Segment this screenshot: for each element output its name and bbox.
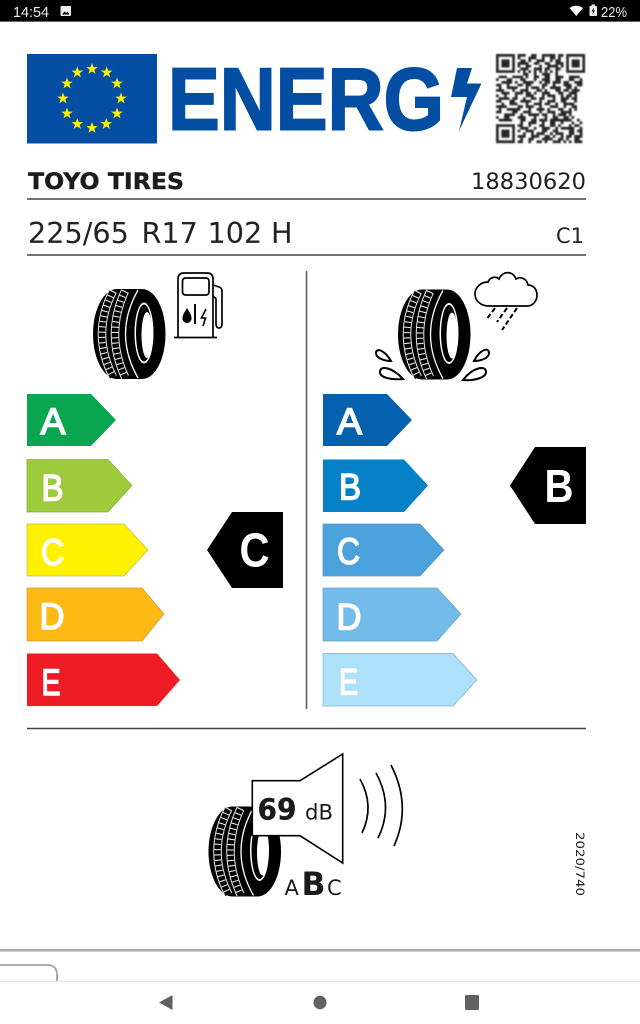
battery percentage: 22% (601, 4, 627, 21)
panel: fuel efficiency (27, 273, 283, 706)
tyre size row (28, 216, 584, 250)
bar C: C (41, 532, 64, 573)
bar A (27, 394, 116, 446)
icon: water splashes (376, 350, 489, 380)
rating badge C (207, 512, 283, 588)
bar A: A (337, 401, 362, 442)
noise class (284, 865, 342, 903)
bar E: E (339, 662, 358, 702)
icon: rain cloud (475, 273, 537, 330)
bar E: E (42, 662, 60, 703)
panel: wet grip (323, 273, 586, 706)
icon: sound waves (360, 765, 402, 846)
bar B: B (339, 466, 361, 508)
noise class: B (302, 865, 326, 903)
icon: recents (465, 995, 479, 1010)
bar B (27, 460, 132, 512)
navigation bar (0, 981, 640, 1024)
bottom page divider (0, 949, 640, 952)
noise value: 69 (258, 792, 296, 826)
rating badge C: C (240, 524, 270, 578)
bar C: C (337, 531, 360, 572)
article number: 18830620 (471, 169, 586, 195)
QR code (496, 55, 584, 142)
noise unit: dB (305, 800, 333, 824)
grip scale (323, 394, 477, 706)
fuel scale (27, 394, 180, 706)
icon: fuel pump (174, 273, 222, 338)
tyre size: R17 (142, 216, 198, 250)
bar A (323, 394, 412, 446)
rating badge B (510, 447, 586, 524)
noise class: C (327, 876, 342, 900)
bar D (27, 588, 164, 641)
icon: tyre (208, 806, 281, 896)
regulation number: 2020/740 (573, 832, 587, 896)
bar D (323, 588, 461, 641)
bar C (323, 524, 444, 576)
rating badge B: B (544, 460, 574, 512)
heading: ENERG: ENERG (168, 50, 444, 148)
bar D: D (40, 596, 64, 637)
bar D: D (336, 596, 362, 638)
status bar (0, 0, 640, 22)
clipped card outline (0, 965, 57, 981)
icon: speaker (252, 754, 343, 863)
bar E (323, 654, 477, 706)
tyre size: H (271, 216, 293, 250)
brand name: TOYO TIRES (28, 170, 184, 195)
icon: home (314, 996, 326, 1009)
clock: 14:54 (13, 4, 49, 21)
bar B (323, 460, 428, 512)
tyre size: 102 (208, 216, 262, 250)
icon: wifi (570, 6, 583, 16)
bar A: A (40, 401, 66, 442)
icon: lightning bolt (451, 68, 482, 131)
tyre size: 225/65 (28, 216, 129, 250)
icon: battery (590, 4, 597, 16)
panel: external rolling noise (208, 754, 402, 903)
icon: back (159, 995, 172, 1010)
brand row (28, 169, 586, 195)
noise class: A (284, 876, 300, 900)
icon: tyre (398, 290, 470, 380)
icon: image notification (60, 6, 71, 16)
icon: tyre (93, 289, 166, 379)
tyre class: C1 (556, 224, 584, 249)
EU flag (27, 54, 157, 144)
bar B: B (42, 468, 64, 508)
bar C (27, 524, 148, 576)
bar E (27, 654, 180, 706)
